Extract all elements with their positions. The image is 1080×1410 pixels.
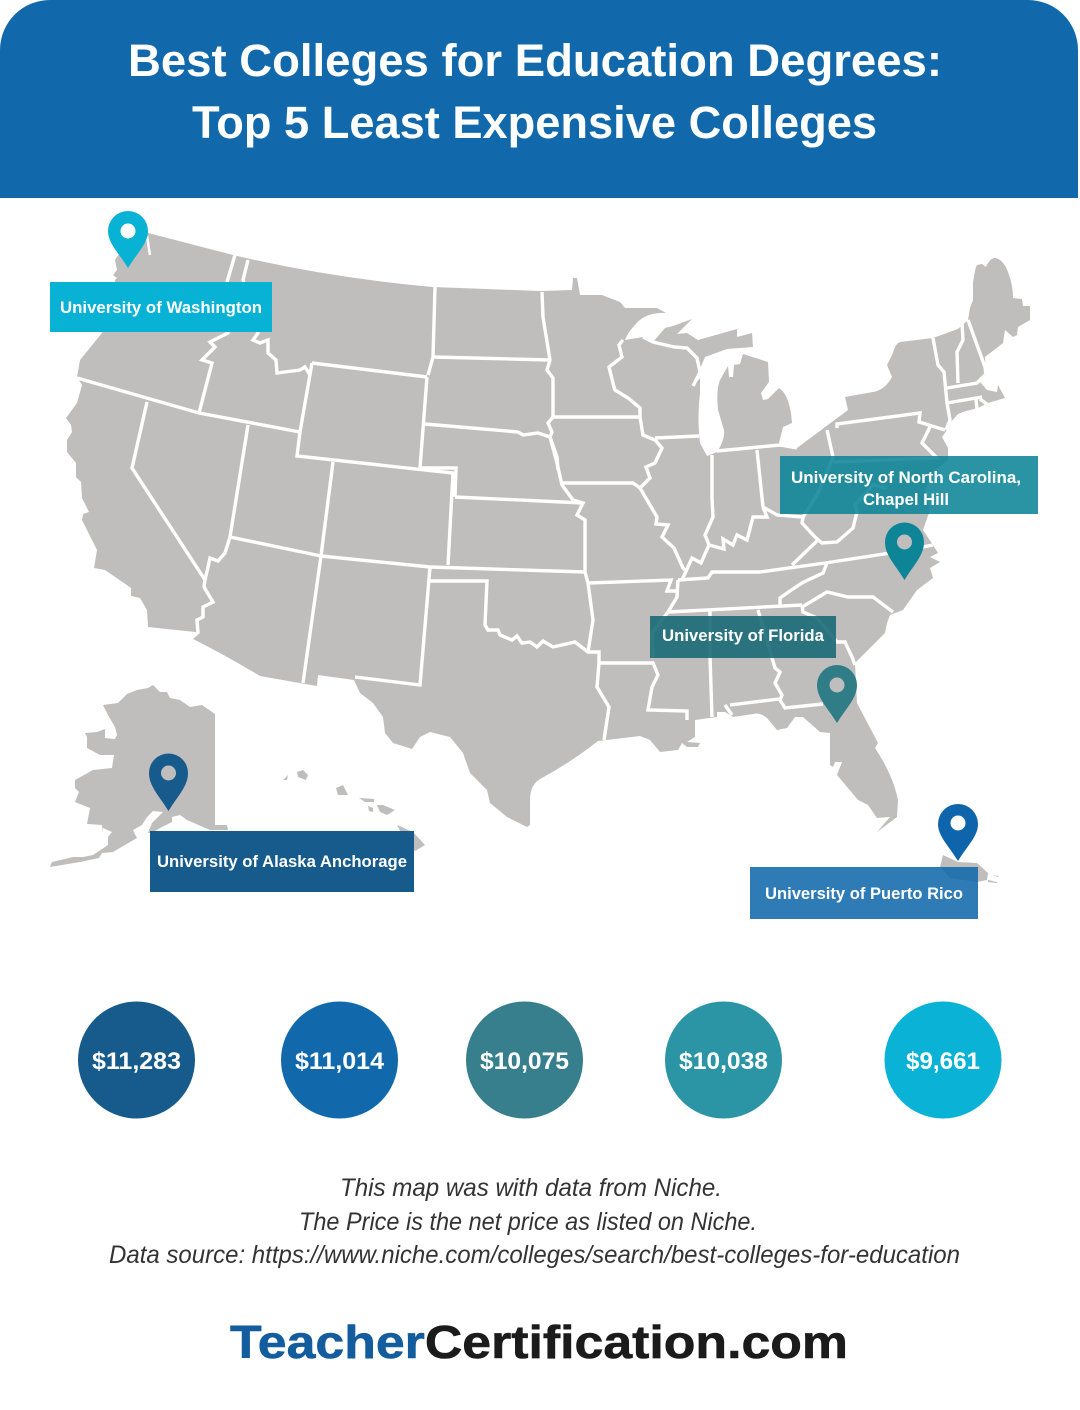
title [128,35,942,148]
label: University of North Carolina, Chapel Hill [780,456,1038,514]
data source note [109,1174,960,1269]
pin: Washington [108,211,148,268]
logo wordmark: Teacher Certification.com [230,1316,848,1368]
title: Top 5 Least Expensive Colleges [192,97,877,148]
pin: Alaska [149,754,188,811]
Hawaii [283,770,425,851]
price circle: $10,038: $10,038 [679,1048,768,1075]
label: University of North Carolina, Chapel Hill: Chapel Hill [863,490,949,509]
price circle: $9,661: $9,661 [906,1048,980,1075]
state borders [77,255,988,740]
Puget Sound notch [147,236,150,255]
Alaska [50,685,228,867]
label: University of Washington: University of Washington [60,298,262,317]
pin: Florida [817,665,857,723]
pin: North Carolina [885,522,924,580]
data source note: Data source: https://www.niche.com/colleges/search/best-colleges-for-education [109,1241,960,1269]
label: University of Florida: University of Florida [662,626,825,645]
label: University of Washington [50,282,272,332]
price circle: $11,283 [78,1002,195,1118]
price circle: $10,075 [466,1002,583,1118]
title: Best Colleges for Education Degrees: [128,35,942,86]
Puerto Rico [940,855,999,883]
price circle: $11,283: $11,283 [92,1048,181,1075]
label: University of Puerto Rico [750,867,978,919]
contiguous states silhouette [66,233,1030,832]
label: University of Puerto Rico: University of Puerto Rico [765,884,963,903]
data source note: The Price is the net price as listed on Niche. [299,1208,757,1236]
label: University of North Carolina, Chapel Hill: University of North Carolina, [791,468,1021,487]
label: University of Alaska Anchorage [150,831,414,892]
map of the United States [50,233,1030,883]
label: University of Florida [650,616,836,658]
price circle: $11,014 [281,1002,398,1118]
price circle: $10,075: $10,075 [480,1048,569,1075]
pin: Puerto Rico [938,804,978,861]
price circle: $11,014: $11,014 [295,1048,385,1075]
data source note: This map was with data from Niche. [340,1174,722,1202]
label: University of Alaska Anchorage: University of Alaska Anchorage [157,852,407,871]
price circle: $10,038 [665,1002,782,1118]
header banner [0,0,1078,198]
price circle: $9,661 [884,1002,1002,1118]
